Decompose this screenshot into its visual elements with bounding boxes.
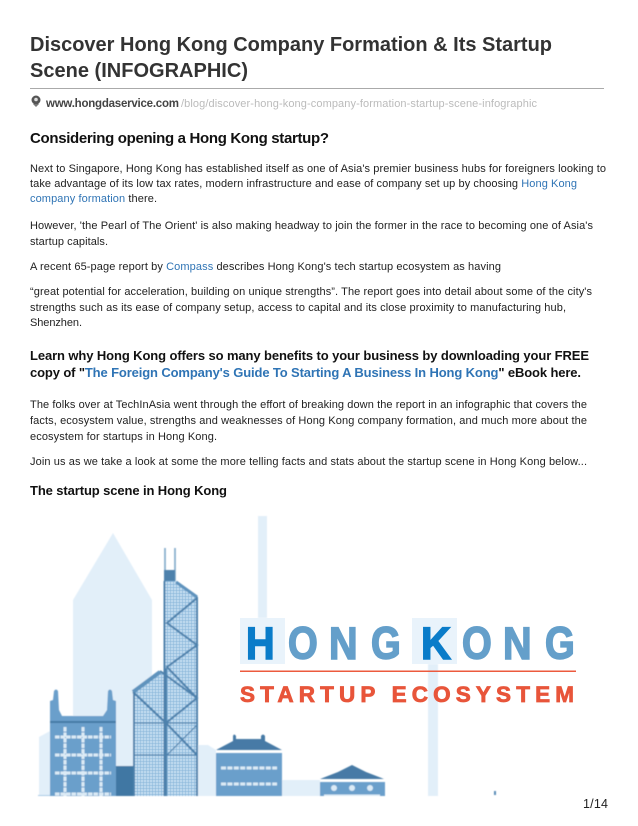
paragraph: join us: Join us as we take a look at some the more telling facts and stats about the startup scene in Hong Kong below... xyxy=(30,456,587,468)
intro paragraph: Next to Singapore, Hong Kong has established itself as one of Asia's premier business hubs for foreigners looking to xyxy=(30,163,606,175)
title: Scene (INFOGRAPHIC) xyxy=(30,60,248,82)
source url: /blog/discover-hong-kong-company-formation-startup-scene-infographic xyxy=(181,98,538,110)
title: Discover Hong Kong Company Formation & Its Startup xyxy=(30,34,552,56)
paragraph: quote: strengths such as its ease of company setup, access to capital and its close proximity to manufacturing hub, xyxy=(30,302,566,314)
building: center block xyxy=(216,734,282,796)
infographic title: hong kong: G xyxy=(371,618,401,668)
page number: 1/14 xyxy=(583,797,608,811)
paragraph: pearl of the orient: However, 'the Pearl of The Orient' is also making headway to join the former in the race to becoming one of Asia's xyxy=(30,220,594,232)
pale background towers xyxy=(39,516,438,796)
paragraph: quote: “great potential for acceleration, building on unique strengths”. The report goes into detail about some of the city's xyxy=(30,286,592,298)
callout: ebook: Learn why Hong Kong offers so many benefits to your business by downloading your FREE xyxy=(30,348,589,363)
intro paragraph: take advantage of its low tax rates, modern infrastructure and ease of company set up by choosing Hong Kong xyxy=(30,178,577,190)
callout: ebook xyxy=(30,348,589,380)
building: left block xyxy=(50,690,116,796)
title xyxy=(30,34,552,82)
infographic subtitle: STARTUP ECOSYSTEM xyxy=(240,682,574,707)
intro paragraph xyxy=(30,163,606,205)
heading: considering: Considering opening a Hong Kong startup? xyxy=(30,130,329,147)
paragraph: compass report: A recent 65-page report by Compass describes Hong Kong's tech startup ecosystem as having xyxy=(30,261,501,273)
building: small block xyxy=(320,765,385,796)
infographic title: hong kong: N xyxy=(503,619,532,669)
building: bank of china tower xyxy=(133,548,198,796)
icon: site marker xyxy=(32,96,40,107)
infographic title: hong kong xyxy=(240,618,575,669)
heading: startup scene: The startup scene in Hong Kong xyxy=(30,483,227,498)
intro paragraph: company formation there. xyxy=(30,193,157,205)
source url: www.hongdaservice.com xyxy=(45,98,179,110)
infographic title: hong kong: O xyxy=(462,618,492,668)
infographic title: hong kong: K xyxy=(421,619,451,669)
illustration: skyline xyxy=(38,516,496,796)
infographic title: hong kong: G xyxy=(545,618,575,668)
paragraph: techinasia: ecosystem for startups in Hong Kong. xyxy=(30,431,217,443)
dark block xyxy=(116,766,133,796)
paragraph: quote: Shenzhen. xyxy=(30,317,82,329)
infographic title: hong kong: H xyxy=(246,619,275,669)
paragraph: techinasia: The folks over at TechInAsia went through the effort of breaking down the report in an infographic that covers the xyxy=(30,399,587,411)
infographic title: hong kong: O xyxy=(288,618,318,668)
paragraph: pearl of the orient xyxy=(30,220,594,248)
paragraph: pearl of the orient: startup capitals. xyxy=(30,236,108,248)
infographic title: hong kong: N xyxy=(329,619,358,669)
callout: ebook: copy of "The Foreign Company's Guide To Starting A Business In Hong Kong" eBook here. xyxy=(30,365,581,380)
paragraph: techinasia: facts, ecosystem value, strengths and weaknesses of Hong Kong company formation, and much more about the xyxy=(30,415,587,427)
paragraph: techinasia xyxy=(30,399,587,443)
paragraph: quote xyxy=(30,286,592,329)
